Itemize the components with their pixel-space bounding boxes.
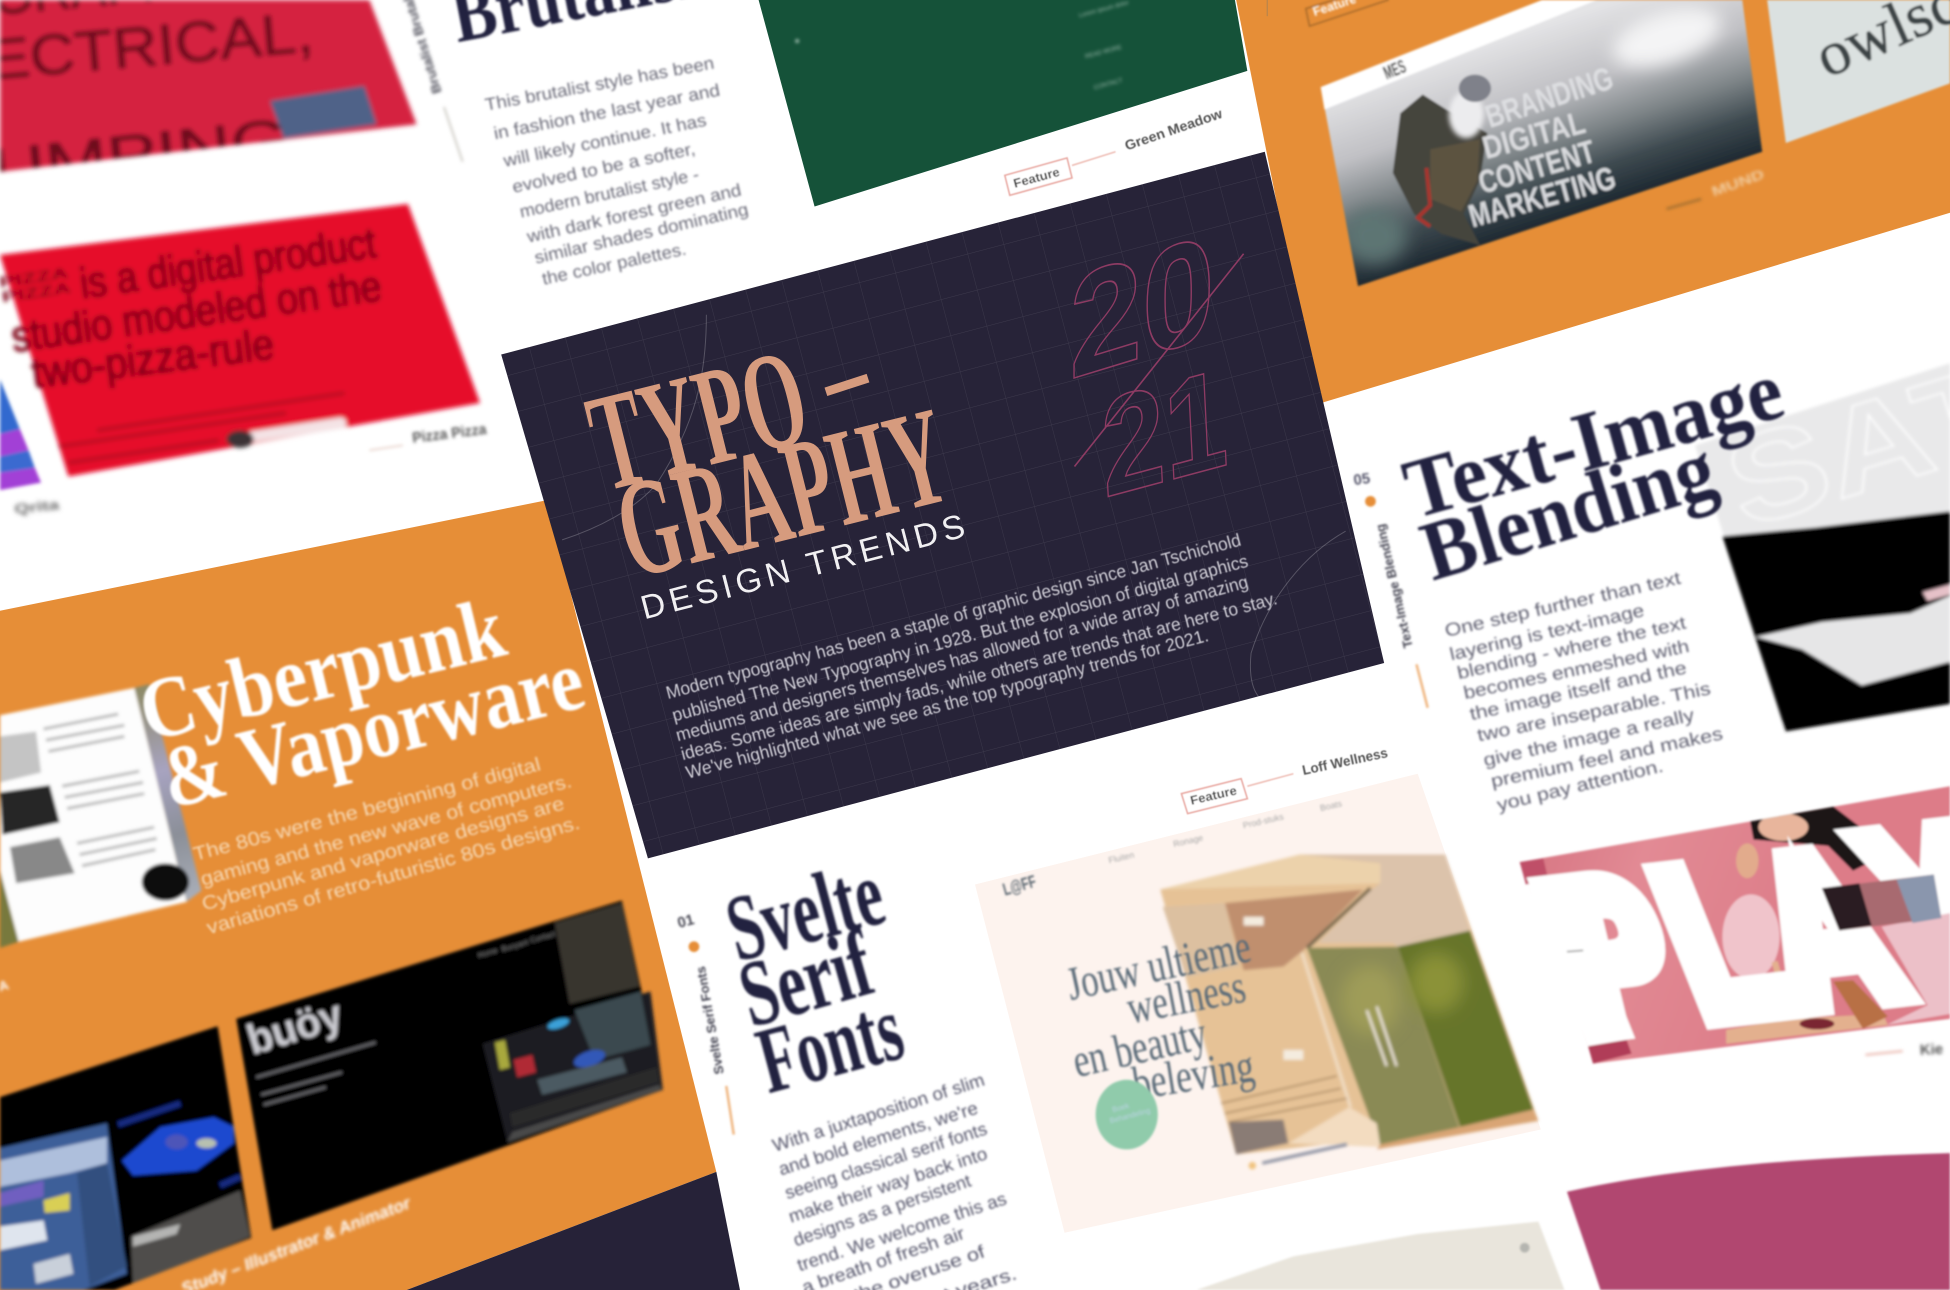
caption: loff feature tag xyxy=(1181,745,1389,814)
heading: typography: GRAPHY xyxy=(602,378,963,609)
year: 20 slash 21 xyxy=(1070,203,1244,528)
model xyxy=(1750,806,1878,871)
number and side label xyxy=(676,911,734,1135)
panel: green meadow xyxy=(759,0,1247,206)
heading: typography: TYPO xyxy=(575,320,822,521)
hero wording: DIGITAL xyxy=(1479,104,1589,166)
text block: brutalism: modern brutalist style - xyxy=(518,164,701,222)
heading: text-image blending: Blending xyxy=(1411,422,1726,599)
text block: text-image xyxy=(1443,568,1724,815)
text block: cyberpunk: variations of retro-futuristic 80s designs. xyxy=(205,813,582,939)
text block: brutalism: This brutalist style has been xyxy=(483,53,716,115)
section: brutalism xyxy=(394,0,750,289)
text block: brutalism xyxy=(483,53,750,289)
text block: svelte: designs as a persistent xyxy=(791,1171,974,1250)
panel: pizza pizza red site xyxy=(0,204,480,476)
text block: cyberpunk: Cyberpunk and vaporware designs are xyxy=(200,794,567,915)
text block: svelte xyxy=(770,1070,1019,1290)
text block: cyberpunk xyxy=(191,754,582,939)
feature tag xyxy=(1306,0,1388,26)
heading: cyberpunk and vaporware: & Vaporware xyxy=(152,630,593,827)
text block: introduction: ideas. Some ideas are simply fads, while others are trends that are here to stay. xyxy=(679,588,1279,764)
background grid xyxy=(501,152,1384,858)
panel: beige site xyxy=(1196,1222,1564,1290)
text block: text-image: the image itself and the xyxy=(1468,657,1688,724)
screenshot: buoy site: Buoyant xyxy=(500,937,530,954)
headline: two-pizza-rule xyxy=(29,321,277,398)
pill control xyxy=(226,423,341,448)
text block: brutalism: with dark forest green and xyxy=(524,180,743,247)
screenshot: buoy site: Contact xyxy=(529,929,557,945)
photo: climbers and marketing headline xyxy=(1321,0,1762,286)
text block: brutalism: similar shades dominating xyxy=(532,199,750,268)
hero wording xyxy=(1465,60,1619,234)
screenshot: editorial page xyxy=(0,684,201,948)
caption: qrita: Qrita xyxy=(14,497,60,517)
play letters: A xyxy=(1722,807,1929,1050)
fine print xyxy=(58,393,344,463)
caption: green meadow feature tag: Feature xyxy=(1012,165,1061,191)
text block: cyberpunk: The 80s were the beginning of digital xyxy=(191,754,543,866)
panel: purple and blue stripes xyxy=(0,379,41,490)
year: 20 slash 21: 20 xyxy=(1070,203,1215,411)
caption: kie: Kie xyxy=(1919,1041,1944,1059)
faint site text: CONTACT xyxy=(1093,77,1124,91)
image: black cat on grey xyxy=(1695,338,1950,731)
number and side label: 01 xyxy=(676,911,696,932)
heading: svelte serif fonts xyxy=(716,841,913,1114)
small tag in P xyxy=(1567,950,1583,952)
hero wording: en beauty xyxy=(1068,1007,1212,1088)
hero wording: wellness xyxy=(1123,961,1250,1035)
text block: text-image: blending - where the text xyxy=(1455,613,1688,683)
year: 20 slash 21: 21 xyxy=(1098,338,1231,528)
text block: text-image: One step further than text xyxy=(1443,568,1682,641)
heading: svelte serif fonts: Fonts xyxy=(747,976,913,1114)
caption: mund: MUND xyxy=(1710,166,1766,199)
text block: text-image: premium feel and makes xyxy=(1489,723,1724,791)
text block: introduction: published The New Typography in 1928. But the explosion of digital graphics xyxy=(670,551,1250,725)
text block: introduction: We've highlighted what we see as the top typography trends for 2021. xyxy=(684,625,1211,783)
headline: studio modeled on the xyxy=(8,262,385,362)
heading: svelte serif fonts: Serif xyxy=(728,911,885,1048)
screenshot: buoy site xyxy=(236,901,663,1230)
caption: pizza pizza xyxy=(369,421,488,450)
caption: loff feature tag: Loff Wellness xyxy=(1301,745,1389,778)
small logo text: PIZZA xyxy=(1,280,72,306)
panel: electrical red poster xyxy=(0,0,420,176)
offer strip xyxy=(1249,1144,1347,1169)
text block: svelte: trend. We welcome this as xyxy=(795,1188,1009,1275)
text block: svelte: With a juxtaposition of slim xyxy=(770,1070,987,1156)
photo: climbers and marketing headline: MES xyxy=(1380,55,1409,83)
play letters xyxy=(1525,814,1950,1040)
text block: text-image: give the image a really xyxy=(1481,705,1696,770)
panel: owlsc xyxy=(1767,0,1950,143)
dress and leg over the letter bases xyxy=(1882,913,1950,1025)
screenshot: buoy site: buöy xyxy=(241,990,348,1063)
headline xyxy=(8,219,385,398)
heading: cyberpunk and vaporware: Cyberpunk xyxy=(130,578,514,760)
heading: svelte serif fonts: Svelte xyxy=(716,841,894,982)
text block: brutalism: will likely continue. It has xyxy=(501,110,708,171)
panel: play knockout image xyxy=(1513,783,1950,1075)
text block: svelte: and bold elements, we're xyxy=(776,1098,980,1179)
soft sky and haze xyxy=(1342,0,1727,264)
hero wording: MARKETING xyxy=(1465,159,1619,234)
panel: orange mund xyxy=(1236,0,1950,404)
number and side label xyxy=(1352,470,1428,708)
side label: brutalism xyxy=(394,0,463,162)
play letters: P xyxy=(1513,833,1711,1075)
number and side label: Text-Image Blending xyxy=(1373,523,1416,650)
stem of P merging into page xyxy=(1526,877,1632,1046)
screenshot: buoy site: Home xyxy=(477,946,498,960)
caption: green meadow feature tag xyxy=(1005,106,1224,195)
hero wording xyxy=(1062,920,1258,1111)
inset image xyxy=(1822,875,1941,930)
poster wording xyxy=(0,0,312,174)
heading: typography: – xyxy=(806,323,884,434)
text block: text-image: layering is text-image xyxy=(1448,600,1646,664)
panel: dark bottom strip xyxy=(407,1172,740,1290)
text block: brutalism: the color palettes. xyxy=(540,239,688,289)
text block: introduction xyxy=(664,530,1279,783)
text block: text-image: two are inseparable. This xyxy=(1475,678,1712,745)
climbers xyxy=(1393,95,1487,245)
text block: text-image: becomes enmeshed with xyxy=(1462,636,1691,703)
panel: centre title card xyxy=(501,152,1384,858)
panel: orange cyberpunk xyxy=(0,500,716,1290)
logo and navigation xyxy=(1000,798,1343,900)
hero wording: beleving xyxy=(1129,1040,1258,1111)
hero wording: CONTENT xyxy=(1474,133,1599,201)
panel: loff wellness site xyxy=(975,774,1541,1233)
text block: introduction: Modern typography has been a staple of graphic design since Jan Tschichold xyxy=(664,530,1243,703)
text block: text-image: you pay attention. xyxy=(1495,756,1665,815)
logo and navigation: Boats xyxy=(1319,798,1343,813)
logo and navigation: Prod-stuks xyxy=(1242,811,1285,830)
panel: magenta site xyxy=(1567,1153,1950,1290)
logo and navigation: L@FF xyxy=(1000,871,1038,900)
text block: brutalism: evolved to be a softer, xyxy=(510,138,697,197)
section: svelte serif fonts xyxy=(676,841,1019,1290)
heading: typography xyxy=(575,320,963,609)
text block: svelte: make their way back into xyxy=(786,1143,990,1227)
green badge: Behandeling xyxy=(1109,1106,1151,1125)
green badge: Boek xyxy=(1111,1101,1130,1114)
section: text-image blending xyxy=(1352,338,1950,815)
faint site text xyxy=(795,0,1130,91)
play letters: L xyxy=(1627,821,1816,1061)
hero wording: BRANDING xyxy=(1481,60,1617,135)
construction curves xyxy=(562,315,1346,697)
caption: pizza pizza: Pizza Pizza xyxy=(411,421,488,447)
screenshot: blue collage site xyxy=(0,1026,251,1290)
logo and navigation: Fluiten xyxy=(1108,850,1135,865)
caption: green meadow feature tag: Green Meadow xyxy=(1123,106,1224,153)
faint site text: READ MORE xyxy=(1084,44,1122,60)
caption: mund xyxy=(1666,166,1766,209)
green badge xyxy=(1096,1080,1158,1149)
image: blue inset xyxy=(270,86,377,138)
text block: svelte: seeing classical serif fonts xyxy=(782,1119,990,1203)
caption: kie xyxy=(1865,1041,1944,1059)
text block: brutalism: in fashion the last year and xyxy=(492,80,722,143)
thin marker line xyxy=(1266,0,1268,16)
text block: introduction: mediums and designers themselves has allowed for a wide array of amazing xyxy=(674,572,1250,745)
heading: text-image blending: Text-Image xyxy=(1394,344,1793,537)
headline: is a digital product xyxy=(77,219,379,308)
number and side label: 05 xyxy=(1352,470,1371,489)
photo: sauna xyxy=(1160,855,1538,1154)
hero wording: Jouw ultieme xyxy=(1062,920,1255,1011)
caption: loff feature tag: Feature xyxy=(1189,783,1238,808)
subheading: design trends: DESIGN TRENDS xyxy=(637,508,969,627)
number and side label: Svelte Serif Fonts xyxy=(693,965,727,1076)
logo and navigation: Ronage xyxy=(1172,832,1204,849)
text block: cyberpunk: gaming and the new wave of computers. xyxy=(199,771,574,891)
small logo text xyxy=(0,265,72,306)
